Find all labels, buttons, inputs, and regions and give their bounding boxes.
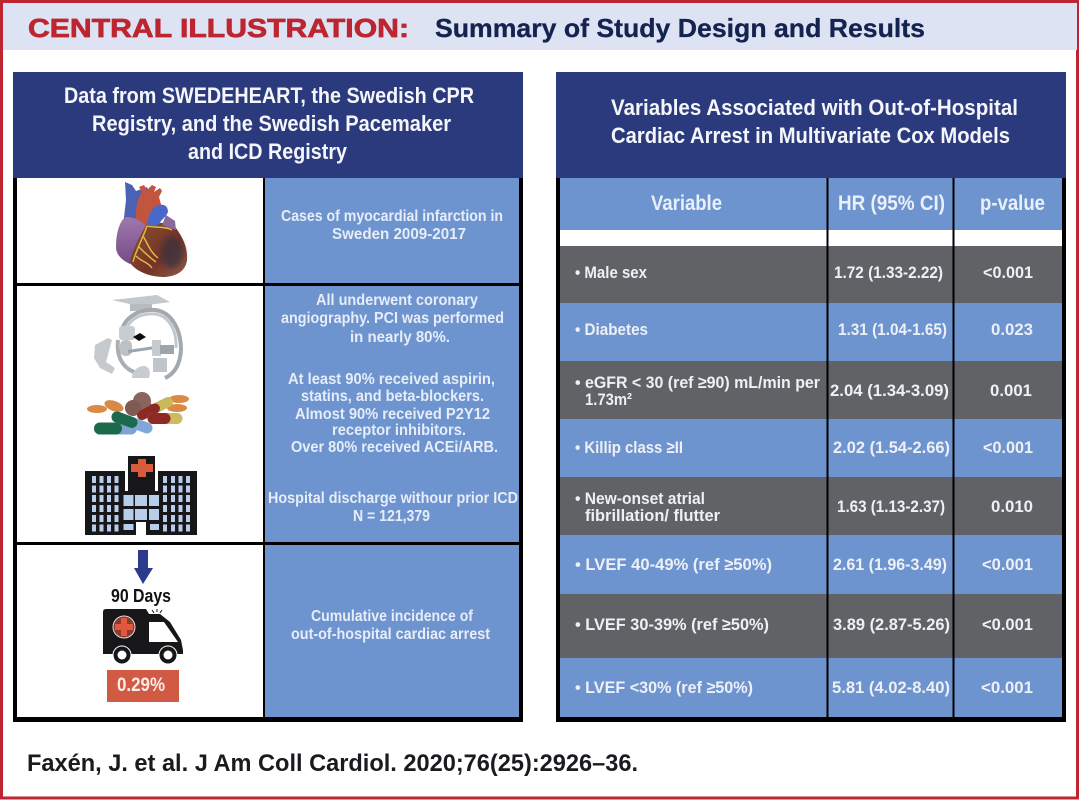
- arrow: 90 days: [134, 550, 153, 584]
- panel frame: [13, 72, 523, 722]
- text: angiography: All underwent coronary: [316, 292, 478, 309]
- panel frame: [556, 72, 1066, 722]
- text: cases: Cases of myocardial infarction in: [281, 208, 503, 225]
- title: [3, 3, 1077, 50]
- row: lvef 30-39: <0.001: [982, 615, 1033, 634]
- heading: variables: Cardiac Arrest in Multivariate Cox Models: [611, 123, 1010, 148]
- text: medication: Almost 90% received P2Y12: [295, 406, 490, 423]
- text: medication: At least 90% received aspirin,: [288, 371, 495, 388]
- row: egfr: 2.04 (1.34-3.09): [830, 381, 949, 400]
- text: angiography: in nearly 80%.: [350, 329, 450, 346]
- row: lvef 40-49: 2.61 (1.96-3.49): [833, 555, 947, 574]
- row: diabetes: [560, 303, 1062, 361]
- text: cumulative incidence: out-of-hospital cardiac arrest: [291, 626, 491, 643]
- text: cases: Sweden 2009-2017: [332, 226, 466, 243]
- row: diabetes: 1.31 (1.04-1.65): [838, 320, 947, 339]
- table header: [560, 178, 1062, 246]
- citation: Faxén, J. et al. J Am Coll Cardiol. 2020;76(25):2926–36.: [27, 750, 638, 777]
- text: discharge: Hospital discharge withour prior ICD: [268, 490, 518, 507]
- heading: data sources: [13, 72, 523, 178]
- row: egfr: • eGFR < 30 (ref ≥90) mL/min per: [575, 373, 820, 392]
- text: cumulative incidence: Cumulative incidence of: [311, 608, 474, 625]
- heading: variables: Variables Associated with Out-of-Hospital: [611, 95, 1018, 120]
- text: angiography: [281, 292, 504, 346]
- row: egfr: 0.001: [990, 381, 1032, 400]
- text: medication: [288, 371, 498, 456]
- row: male sex: • Male sex: [575, 263, 647, 282]
- row: egfr: 1.73m²: [585, 390, 632, 409]
- callout: incidence: 0.29%: [117, 675, 165, 696]
- icon: pills: [87, 392, 189, 428]
- heading: data sources: Data from SWEDEHEART, the Swedish CPR: [64, 83, 474, 108]
- row: lvef 40-49: <0.001: [982, 555, 1033, 574]
- text: cumulative incidence: [291, 608, 491, 643]
- icon: heart: [116, 182, 187, 277]
- row: lvef under 30: [560, 658, 1062, 717]
- icon: angiography machine: [94, 295, 181, 378]
- icon: hospital: [85, 456, 197, 535]
- panel: study design: [13, 72, 523, 722]
- row: diabetes: 0.023: [991, 320, 1033, 339]
- table header: p-value: [980, 192, 1045, 215]
- text: medication: statins, and beta-blockers.: [301, 388, 484, 405]
- row: killip: [560, 419, 1062, 477]
- title: Summary of Study Design and Results: [435, 13, 925, 43]
- row: killip: • Killip class ≥II: [575, 438, 683, 457]
- title: CENTRAL ILLUSTRATION:: [28, 13, 409, 43]
- row: diabetes: • Diabetes: [575, 320, 648, 339]
- text: medication: receptor inhibitors.: [332, 422, 466, 439]
- callout: incidence: [107, 670, 179, 702]
- row: atrial fibrillation: 1.63 (1.13-2.37): [837, 497, 945, 516]
- text: discharge: N = 121,379: [353, 508, 430, 525]
- panel: cox model results: [556, 72, 1066, 722]
- heading: variables: [556, 72, 1066, 178]
- table header: HR (95% CI): [838, 192, 945, 215]
- row: male sex: 1.72 (1.33-2.22): [834, 263, 943, 282]
- row: atrial fibrillation: 0.010: [991, 497, 1033, 516]
- row: lvef 40-49: [560, 535, 1062, 594]
- row: atrial fibrillation: • New-onset atrial: [575, 489, 705, 508]
- row: lvef under 30: • LVEF <30% (ref ≥50%): [575, 678, 753, 697]
- row: killip: 2.02 (1.54-2.66): [833, 438, 950, 457]
- row: lvef under 30: 5.81 (4.02-8.40): [832, 678, 950, 697]
- label: 90 days: 90 Days: [111, 586, 171, 606]
- row: male sex: [560, 246, 1062, 303]
- row: killip: <0.001: [983, 438, 1033, 457]
- text: medication: Over 80% received ACEi/ARB.: [291, 439, 498, 456]
- row: lvef 30-39: • LVEF 30-39% (ref ≥50%): [575, 615, 769, 634]
- row: egfr: [560, 361, 1062, 419]
- text: discharge: [268, 490, 518, 525]
- row: lvef 30-39: [560, 594, 1062, 658]
- icon: ambulance: [103, 609, 183, 664]
- table header: Variable: [651, 192, 722, 215]
- row: male sex: <0.001: [983, 263, 1033, 282]
- row: lvef under 30: <0.001: [981, 678, 1033, 697]
- row: atrial fibrillation: [560, 477, 1062, 535]
- heading: data sources: Registry, and the Swedish Pacemaker: [92, 111, 451, 136]
- row: atrial fibrillation: fibrillation/ flutter: [585, 506, 720, 525]
- text: angiography: angiography. PCI was performed: [281, 310, 504, 327]
- row: lvef 30-39: 3.89 (2.87-5.26): [833, 615, 950, 634]
- heading: data sources: and ICD Registry: [188, 139, 348, 164]
- row: lvef 40-49: • LVEF 40-49% (ref ≥50%): [575, 555, 772, 574]
- text: cases: [281, 208, 503, 243]
